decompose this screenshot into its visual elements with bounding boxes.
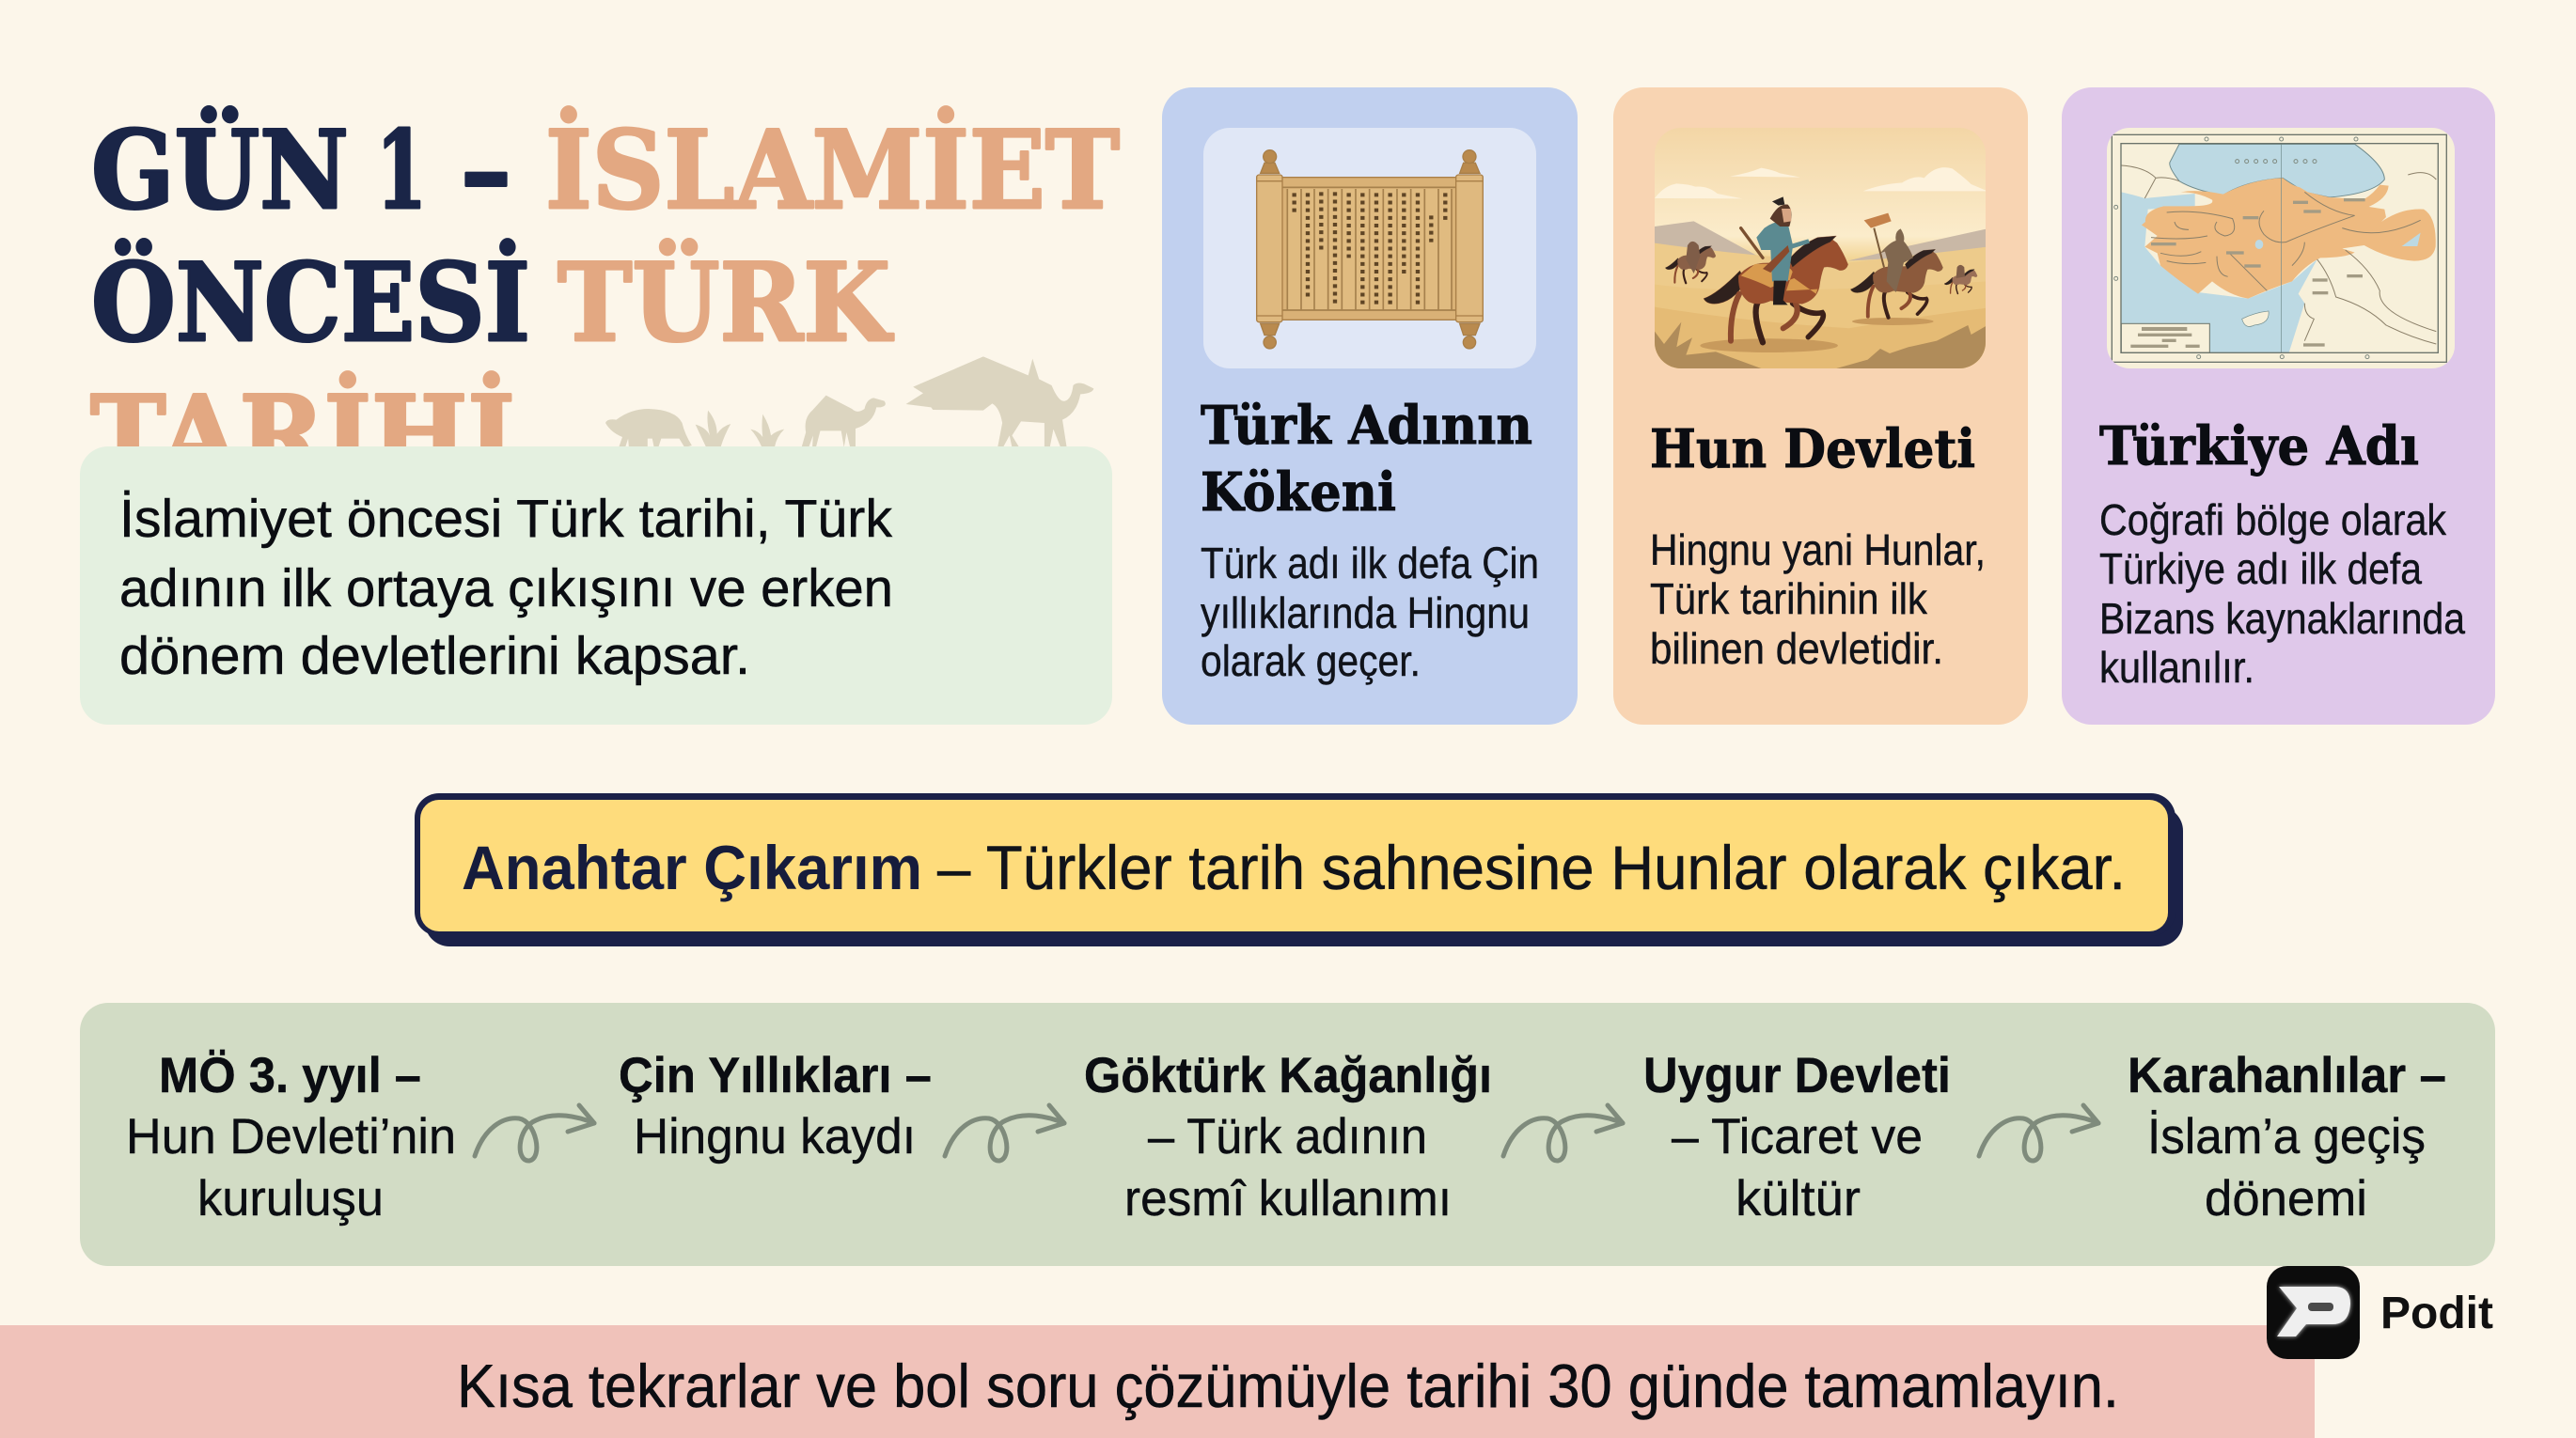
timeline step 3	[1084, 1048, 1492, 1227]
footer banner	[0, 1325, 2315, 1438]
timeline step 5: İslam’a geçiş	[2147, 1109, 2426, 1164]
callout bold text: Anahtar Çıkarım	[462, 833, 922, 902]
timeline step 4: Uygur Devleti	[1643, 1048, 1951, 1103]
distant riders	[1665, 242, 1977, 293]
callout: key takeaway	[415, 793, 2183, 946]
panel: Türk Adının Kökeni	[1162, 87, 1578, 725]
card heading: Türkiye Adı	[2099, 415, 2419, 477]
card body: Coğrafi bölge olarak	[2099, 495, 2447, 544]
panel: Türkiye Adı	[2062, 87, 2495, 725]
timeline step 1	[126, 1048, 456, 1227]
callout regular text: – Türkler tarih sahnesine Hunlar olarak çıkar.	[937, 833, 2126, 902]
banner rider	[1850, 213, 1943, 318]
intro text: adının ilk ortaya çıkışını ve erken	[119, 558, 893, 618]
title line 1 navy: GÜN	[91, 107, 349, 233]
footer text: Kısa tekrarlar ve bol soru çözümüyle tarihi 30 günde tamamlayın.	[457, 1352, 2119, 1420]
main horse and rider	[1704, 196, 1848, 342]
timeline step 2: Çin Yıllıkları –	[619, 1048, 932, 1103]
title line 3 peach, clipped: TARİHİ	[90, 371, 515, 498]
title	[90, 106, 1120, 498]
card heading: Türk Adının	[1201, 395, 1532, 457]
timeline step 1: kuruluşu	[197, 1171, 384, 1227]
card body	[1650, 525, 1986, 673]
card heading: Hun Devleti	[1650, 418, 1975, 480]
intro text: dönem devletlerini kapsar.	[119, 626, 750, 686]
title line 1 navy: 1	[376, 107, 427, 233]
panel: Hun Devleti	[1613, 87, 2028, 725]
title line 1 navy	[91, 107, 511, 233]
timeline step 1: Hun Devleti’nin	[126, 1109, 456, 1164]
icon: scroll	[1203, 128, 1536, 368]
title line 2 navy: ÖNCESİ	[91, 239, 530, 366]
card body: bilinen devletidir.	[1650, 624, 1943, 673]
arrow 4	[1979, 1105, 2098, 1161]
timeline step 5: dönemi	[2205, 1171, 2367, 1227]
timeline step 5: Karahanlılar –	[2128, 1048, 2446, 1103]
card body: Bizans kaynaklarında	[2099, 594, 2465, 643]
timeline step 5	[2128, 1048, 2446, 1227]
timeline step 4: – Ticaret ve	[1672, 1109, 1923, 1164]
timeline step 4	[1643, 1048, 1951, 1227]
card heading: Kökeni	[1201, 461, 1396, 524]
panel: intro	[80, 446, 1112, 725]
arrow 2	[945, 1105, 1064, 1161]
arrow 1	[475, 1105, 594, 1161]
card body	[2099, 495, 2465, 692]
timeline step 3: Göktürk Kağanlığı	[1084, 1048, 1492, 1103]
intro text	[119, 489, 893, 686]
intro text: İslamiyet öncesi Türk tarihi, Türk	[119, 489, 892, 549]
logo: Podit	[2267, 1266, 2493, 1359]
timeline step 2	[619, 1048, 932, 1164]
title line 2 peach: TÜRK	[558, 240, 894, 366]
illustration: Hun horsemen	[1655, 128, 1987, 368]
title line 1 navy: –	[461, 107, 511, 233]
card body	[1201, 539, 1539, 685]
title line 1 peach: İSLAMİET	[545, 106, 1120, 233]
timeline step 1: MÖ 3. yyıl –	[159, 1048, 421, 1103]
card body: Türk adı ilk defa Çin	[1201, 539, 1539, 587]
card body: Türkiye adı ilk defa	[2099, 544, 2422, 593]
illustration: map of Anatolia	[2107, 128, 2455, 368]
timeline step 4: kültür	[1736, 1171, 1861, 1227]
steppe silhouettes	[605, 356, 1093, 447]
card body: olarak geçer.	[1201, 636, 1421, 685]
timeline step 3: resmî kullanımı	[1124, 1171, 1452, 1227]
panel: timeline	[80, 1003, 2495, 1266]
timeline step 2: Hingnu kaydı	[634, 1109, 916, 1164]
card heading	[1201, 395, 1532, 524]
icon: Podit P mark	[2267, 1266, 2360, 1359]
arrow 3	[1503, 1105, 1623, 1161]
card body: kullanılır.	[2099, 643, 2254, 692]
card body: Hingnu yani Hunlar,	[1650, 525, 1986, 574]
card body: yıllıklarında Hingnu	[1201, 588, 1530, 637]
card body: Türk tarihinin ilk	[1650, 574, 1928, 623]
timeline step 3: – Türk adının	[1148, 1109, 1427, 1164]
wordmark: Podit	[2380, 1289, 2493, 1338]
